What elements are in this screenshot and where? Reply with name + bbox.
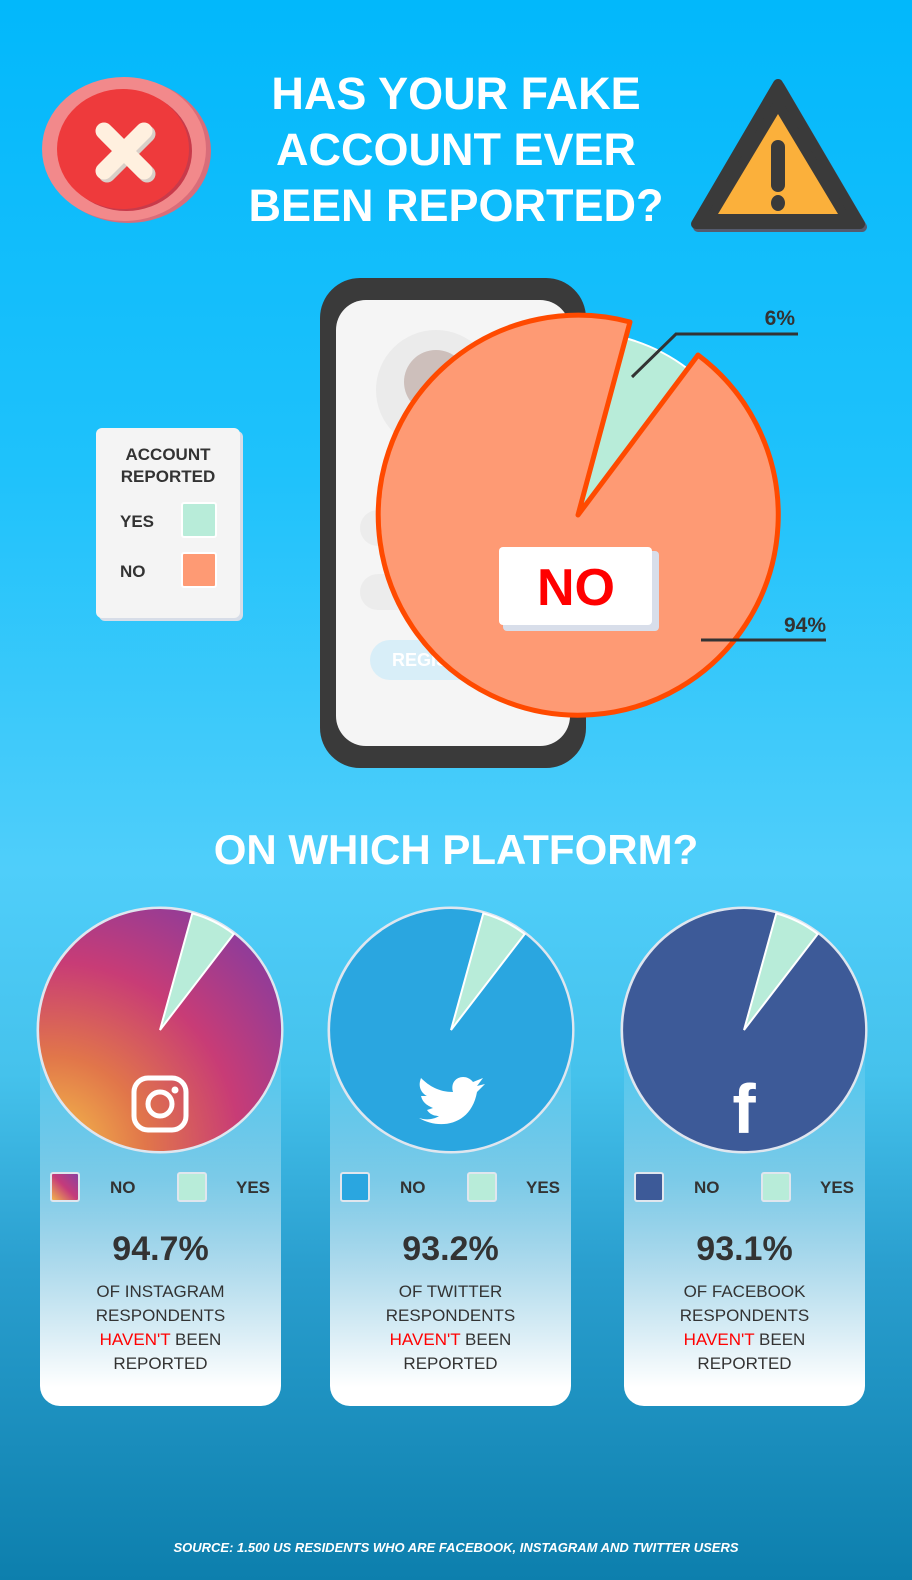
card: instagram: NO [110,1178,136,1197]
legend: account reported: YES [120,512,154,531]
phone: REGIS [392,650,448,670]
card: twitter: YES [526,1178,560,1197]
card: instagram [40,1030,281,1406]
legend: account reported: NO [120,562,146,581]
card: twitter: REPORTED [403,1354,498,1373]
pie: facebook [622,908,866,1152]
card: twitter: 93.2% [402,1230,499,1268]
icon: facebook f: f [732,1070,756,1148]
card: twitter: NO [400,1178,426,1197]
card: instagram: OF INSTAGRAM [96,1282,225,1301]
icon: red x circle [42,77,211,223]
card: twitter: OF TWITTER [399,1282,502,1301]
card: instagram: YES [236,1178,270,1197]
title [248,68,664,231]
card: instagram: REPORTED [113,1354,208,1373]
title: HAS YOUR FAKE [271,68,641,119]
icon: instagram [134,1078,186,1130]
card: instagram: RESPONDENTS [96,1306,225,1325]
label: 94%: 94% [784,614,826,637]
card: twitter: HAVEN'T BEEN [390,1330,511,1349]
label: 6% [632,307,798,377]
heading: on which platform: ON WHICH PLATFORM? [214,826,698,873]
main pie chart [376,307,826,718]
pie: instagram [38,908,282,1152]
card: facebook: 93.1% [696,1230,793,1268]
platform pies [36,906,868,1154]
card: facebook: REPORTED [697,1354,792,1373]
source note: SOURCE: 1.500 US RESIDENTS WHO ARE FACEBOOK, INSTAGRAM AND TWITTER USERS [173,1540,739,1555]
card: facebook: OF FACEBOOK [684,1282,805,1301]
pie: twitter [329,908,573,1152]
label: NO badge [499,547,659,631]
title: ACCOUNT EVER [276,124,636,175]
card: instagram: 94.7% [112,1230,209,1268]
label: 6%: 6% [765,307,795,330]
card: facebook: YES [820,1178,854,1197]
icon: warning triangle [691,79,867,232]
title: BEEN REPORTED? [248,180,664,231]
card: facebook [624,1030,865,1406]
label: NO badge: NO [537,559,615,617]
card: facebook: HAVEN'T BEEN [684,1330,805,1349]
card: facebook: RESPONDENTS [680,1306,809,1325]
card: twitter: RESPONDENTS [386,1306,515,1325]
label: 94% [701,614,826,640]
card: instagram: HAVEN'T BEEN [100,1330,221,1349]
icon: twitter bird [419,1077,485,1124]
legend: account reported: REPORTED [121,467,215,486]
legend: account reported: ACCOUNT [126,445,210,464]
card: facebook: NO [694,1178,720,1197]
phone [320,278,586,768]
legend: account reported [96,428,240,618]
card: twitter [330,1030,571,1406]
